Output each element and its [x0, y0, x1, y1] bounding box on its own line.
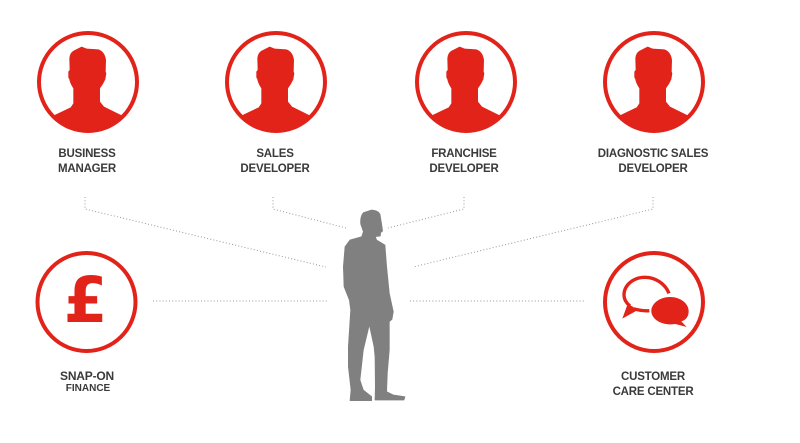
label: customer care center: CARE CENTER	[613, 386, 694, 398]
label: franchise developer: DEVELOPER	[429, 163, 499, 175]
icon: diagnostic sales developer avatar	[605, 33, 703, 131]
connector: business manager to figure	[85, 197, 326, 267]
label: business manager: MANAGER	[58, 163, 117, 175]
icon: pound sign in circle	[38, 253, 136, 351]
label: snap-on finance: SNAP-ON	[60, 369, 114, 383]
label: franchise developer: FRANCHISE	[431, 148, 497, 160]
label: diagnostic sales developer: DIAGNOSTIC SALES	[598, 148, 709, 160]
figure: standing man silhouette	[343, 210, 405, 401]
label: snap-on finance	[60, 369, 114, 394]
connector: diagnostic sales developer to figure	[413, 197, 653, 267]
label: sales developer	[240, 148, 310, 175]
icon: pound sign in circle: £	[64, 264, 107, 337]
icon: franchise developer avatar	[417, 33, 515, 131]
label: business manager	[58, 148, 117, 175]
icon: speech bubbles in circle	[605, 253, 703, 351]
label: diagnostic sales developer	[598, 148, 709, 175]
label: sales developer: DEVELOPER	[240, 163, 310, 175]
label: sales developer: SALES	[256, 148, 294, 160]
label: diagnostic sales developer: DEVELOPER	[618, 163, 688, 175]
label: business manager: BUSINESS	[58, 148, 116, 160]
label: customer care center	[613, 371, 694, 398]
icon: business manager avatar	[39, 33, 137, 131]
icon: sales developer avatar	[227, 33, 325, 131]
connector: sales developer to figure	[273, 197, 346, 228]
label: snap-on finance: FINANCE	[66, 383, 111, 394]
label: franchise developer	[429, 148, 499, 175]
connector: customer care to figure	[410, 300, 585, 302]
connector: franchise developer to figure	[388, 197, 464, 228]
connector: finance to figure	[153, 300, 328, 302]
label: customer care center: CUSTOMER	[621, 371, 686, 383]
